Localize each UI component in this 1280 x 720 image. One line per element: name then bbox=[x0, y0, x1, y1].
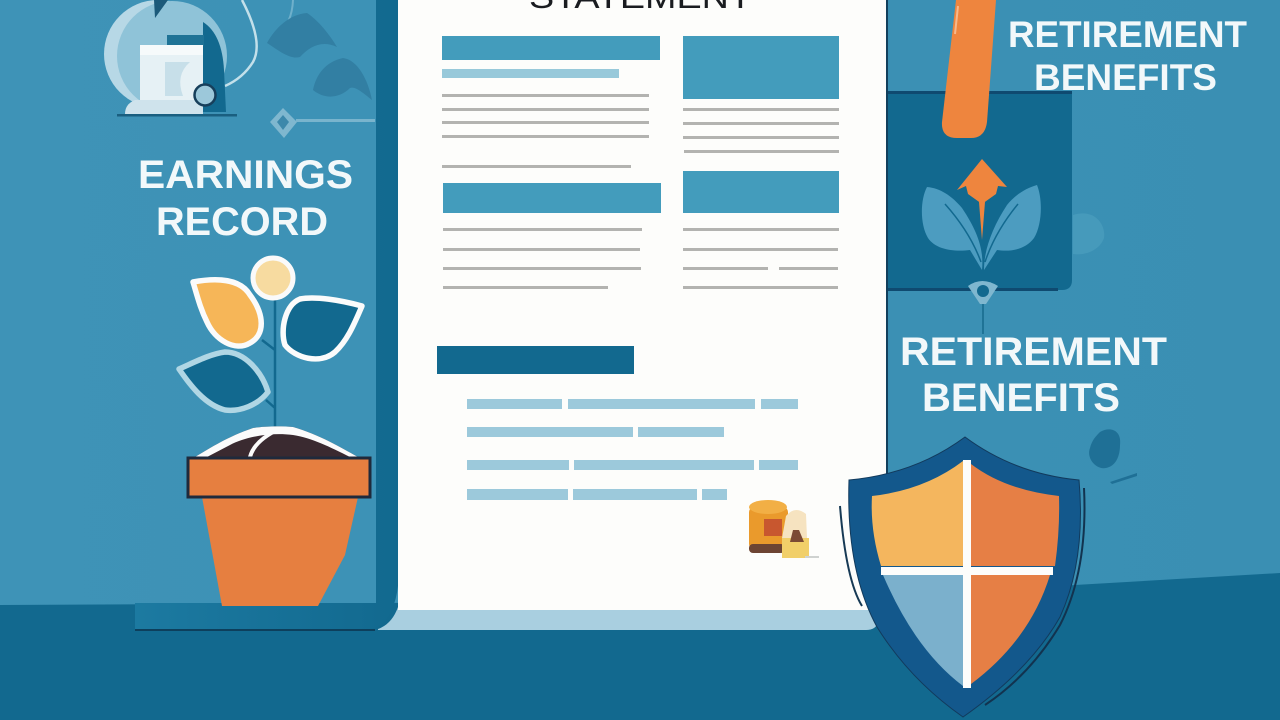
shield orange top quadrant bbox=[971, 464, 1059, 566]
heading: retirement benefits top bbox=[1008, 14, 1247, 98]
heading: retirement benefits lower bbox=[900, 330, 1167, 420]
icon: plant in orange pot bbox=[179, 258, 370, 606]
arrow bbox=[957, 159, 1007, 204]
left panel spine bbox=[135, 0, 399, 631]
shield orange bottom quadrant bbox=[971, 575, 1050, 684]
section: lower rows bbox=[467, 399, 798, 500]
icon: building coin with magnifier bbox=[104, 0, 293, 116]
heading: earnings record bbox=[138, 153, 353, 244]
paper base bbox=[378, 607, 878, 630]
icon: orange bar bbox=[942, 0, 996, 138]
section: middle right bbox=[683, 171, 839, 289]
soil bbox=[195, 426, 358, 457]
stem bbox=[262, 300, 275, 428]
section: upper right bbox=[683, 36, 839, 153]
heading: retirement benefits top: RETIREMENT bbox=[1008, 14, 1247, 55]
icon: sprout with up arrow bbox=[922, 159, 1041, 270]
heading: retirement benefits lower: RETIREMENT bbox=[900, 330, 1167, 374]
small diamond connector bbox=[270, 108, 375, 138]
shield yellow quadrant bbox=[872, 461, 963, 566]
icon: shield bbox=[840, 437, 1084, 717]
faded blob and tick bbox=[1089, 429, 1137, 484]
left leaf bbox=[922, 187, 982, 270]
right leaf bbox=[984, 185, 1041, 270]
heading: earnings record: RECORD bbox=[156, 200, 328, 244]
blue left leaf bbox=[179, 352, 268, 410]
icon: coins and small bag bbox=[749, 500, 819, 558]
icon: small connector gem bbox=[968, 281, 998, 334]
decorative faded leaves bbox=[267, 13, 372, 100]
section: middle left bbox=[443, 183, 661, 289]
heading: retirement benefits lower: BENEFITS bbox=[922, 376, 1120, 420]
shield blue quadrant bbox=[883, 575, 963, 686]
shield white cross bbox=[881, 460, 1053, 688]
floor bbox=[0, 573, 1280, 720]
section: lower heading bar bbox=[437, 346, 634, 374]
pot body bbox=[202, 497, 358, 606]
section: upper left bbox=[442, 36, 660, 168]
heading: earnings record: EARNINGS bbox=[138, 153, 353, 197]
blue right leaf bbox=[283, 298, 362, 359]
pot rim bbox=[188, 458, 370, 497]
yellow leaf bbox=[193, 280, 261, 346]
coin flower bbox=[253, 258, 293, 298]
right dark panel bbox=[888, 91, 1072, 291]
heading: retirement benefits top: BENEFITS bbox=[1034, 57, 1217, 98]
document page bbox=[398, 0, 888, 610]
faint smudge bbox=[1073, 213, 1104, 254]
